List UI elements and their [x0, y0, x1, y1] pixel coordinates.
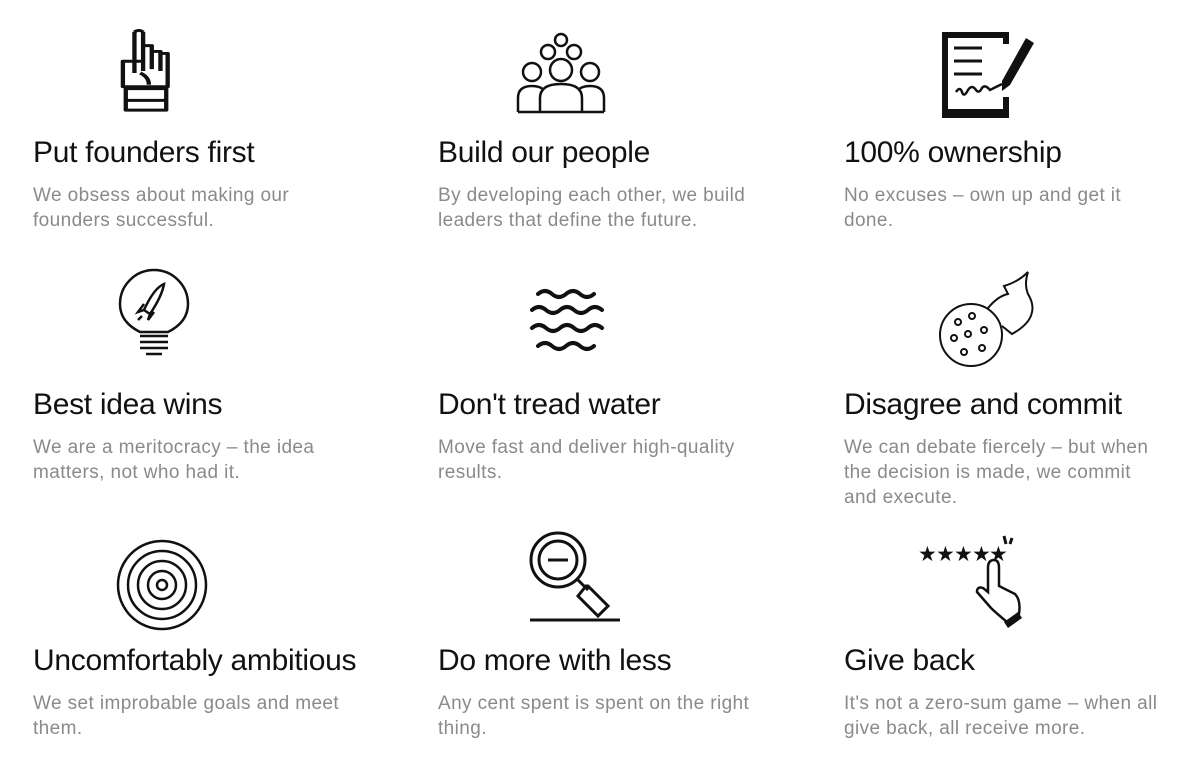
- panel: do more with less: Do more with less: [438, 644, 671, 677]
- panel: uncomfortably ambitious: them.: [33, 718, 83, 739]
- panel: disagree and commit: and execute.: [844, 487, 958, 508]
- panel: 100% ownership: 100% ownership: [844, 136, 1062, 169]
- panel: 100% ownership: done.: [844, 210, 894, 231]
- panel: disagree and commit: We can debate fiercely – but when: [844, 437, 1148, 458]
- panel: disagree and commit: [844, 388, 1148, 508]
- panel: don't tread water: Move fast and deliver high-quality: [438, 437, 735, 458]
- icon: meteor: [939, 271, 1034, 367]
- panel: build our people: Build our people: [438, 136, 650, 169]
- panel: give back: [844, 644, 1157, 739]
- icon: target: [116, 540, 208, 630]
- panel: uncomfortably ambitious: We set improbable goals and meet: [33, 693, 339, 714]
- panel: best idea wins: We are a meritocracy – the idea: [33, 437, 314, 458]
- panel: put founders first: We obsess about making our: [33, 185, 289, 206]
- icon: signed document: [942, 32, 1034, 118]
- panel: put founders first: founders successful.: [33, 210, 214, 231]
- panel: disagree and commit: Disagree and commit: [844, 388, 1122, 421]
- panel: put founders first: Put founders first: [33, 136, 254, 169]
- panel: 100% ownership: No excuses – own up and get it: [844, 185, 1121, 206]
- panel: best idea wins: Best idea wins: [33, 388, 222, 421]
- panel: do more with less: [438, 644, 749, 739]
- panel: best idea wins: [33, 388, 314, 483]
- icon: magnifier: [530, 532, 620, 622]
- panel: give back: It's not a zero-sum game – when all: [844, 693, 1157, 714]
- panel: do more with less: thing.: [438, 718, 487, 739]
- panel: don't tread water: results.: [438, 462, 502, 483]
- panel: give back: give back, all receive more.: [844, 718, 1085, 739]
- panel: disagree and commit: the decision is made, we commit: [844, 462, 1131, 483]
- panel: don't tread water: [438, 388, 735, 483]
- panel: uncomfortably ambitious: Uncomfortably ambitious: [33, 644, 356, 677]
- panel: best idea wins: matters, not who had it.: [33, 462, 240, 483]
- icon: stars with tapping hand: ★: [918, 542, 937, 566]
- panel: build our people: By developing each other, we build: [438, 185, 745, 206]
- icon: stars with tapping hand: ★: [989, 542, 1008, 566]
- icon: stars with tapping hand: [918, 536, 1022, 628]
- icon: waves: [530, 288, 604, 352]
- panel: don't tread water: Don't tread water: [438, 388, 660, 421]
- icon: stars with tapping hand: ★: [954, 542, 973, 566]
- panel: build our people: leaders that define the future.: [438, 210, 698, 231]
- panel: uncomfortably ambitious: [33, 644, 356, 739]
- icon: pointing hand: [120, 29, 170, 112]
- panel: put founders first: [33, 136, 289, 231]
- panel: give back: Give back: [844, 644, 975, 677]
- icon: stars with tapping hand: ★: [936, 542, 955, 566]
- panel: build our people: [438, 136, 745, 231]
- icon: light bulb with rocket: [118, 268, 190, 356]
- panel: 100% ownership: [844, 136, 1121, 231]
- icon: people group: [516, 32, 606, 114]
- panel: do more with less: Any cent spent is spent on the right: [438, 693, 749, 714]
- icon: stars with tapping hand: ★: [972, 542, 991, 566]
